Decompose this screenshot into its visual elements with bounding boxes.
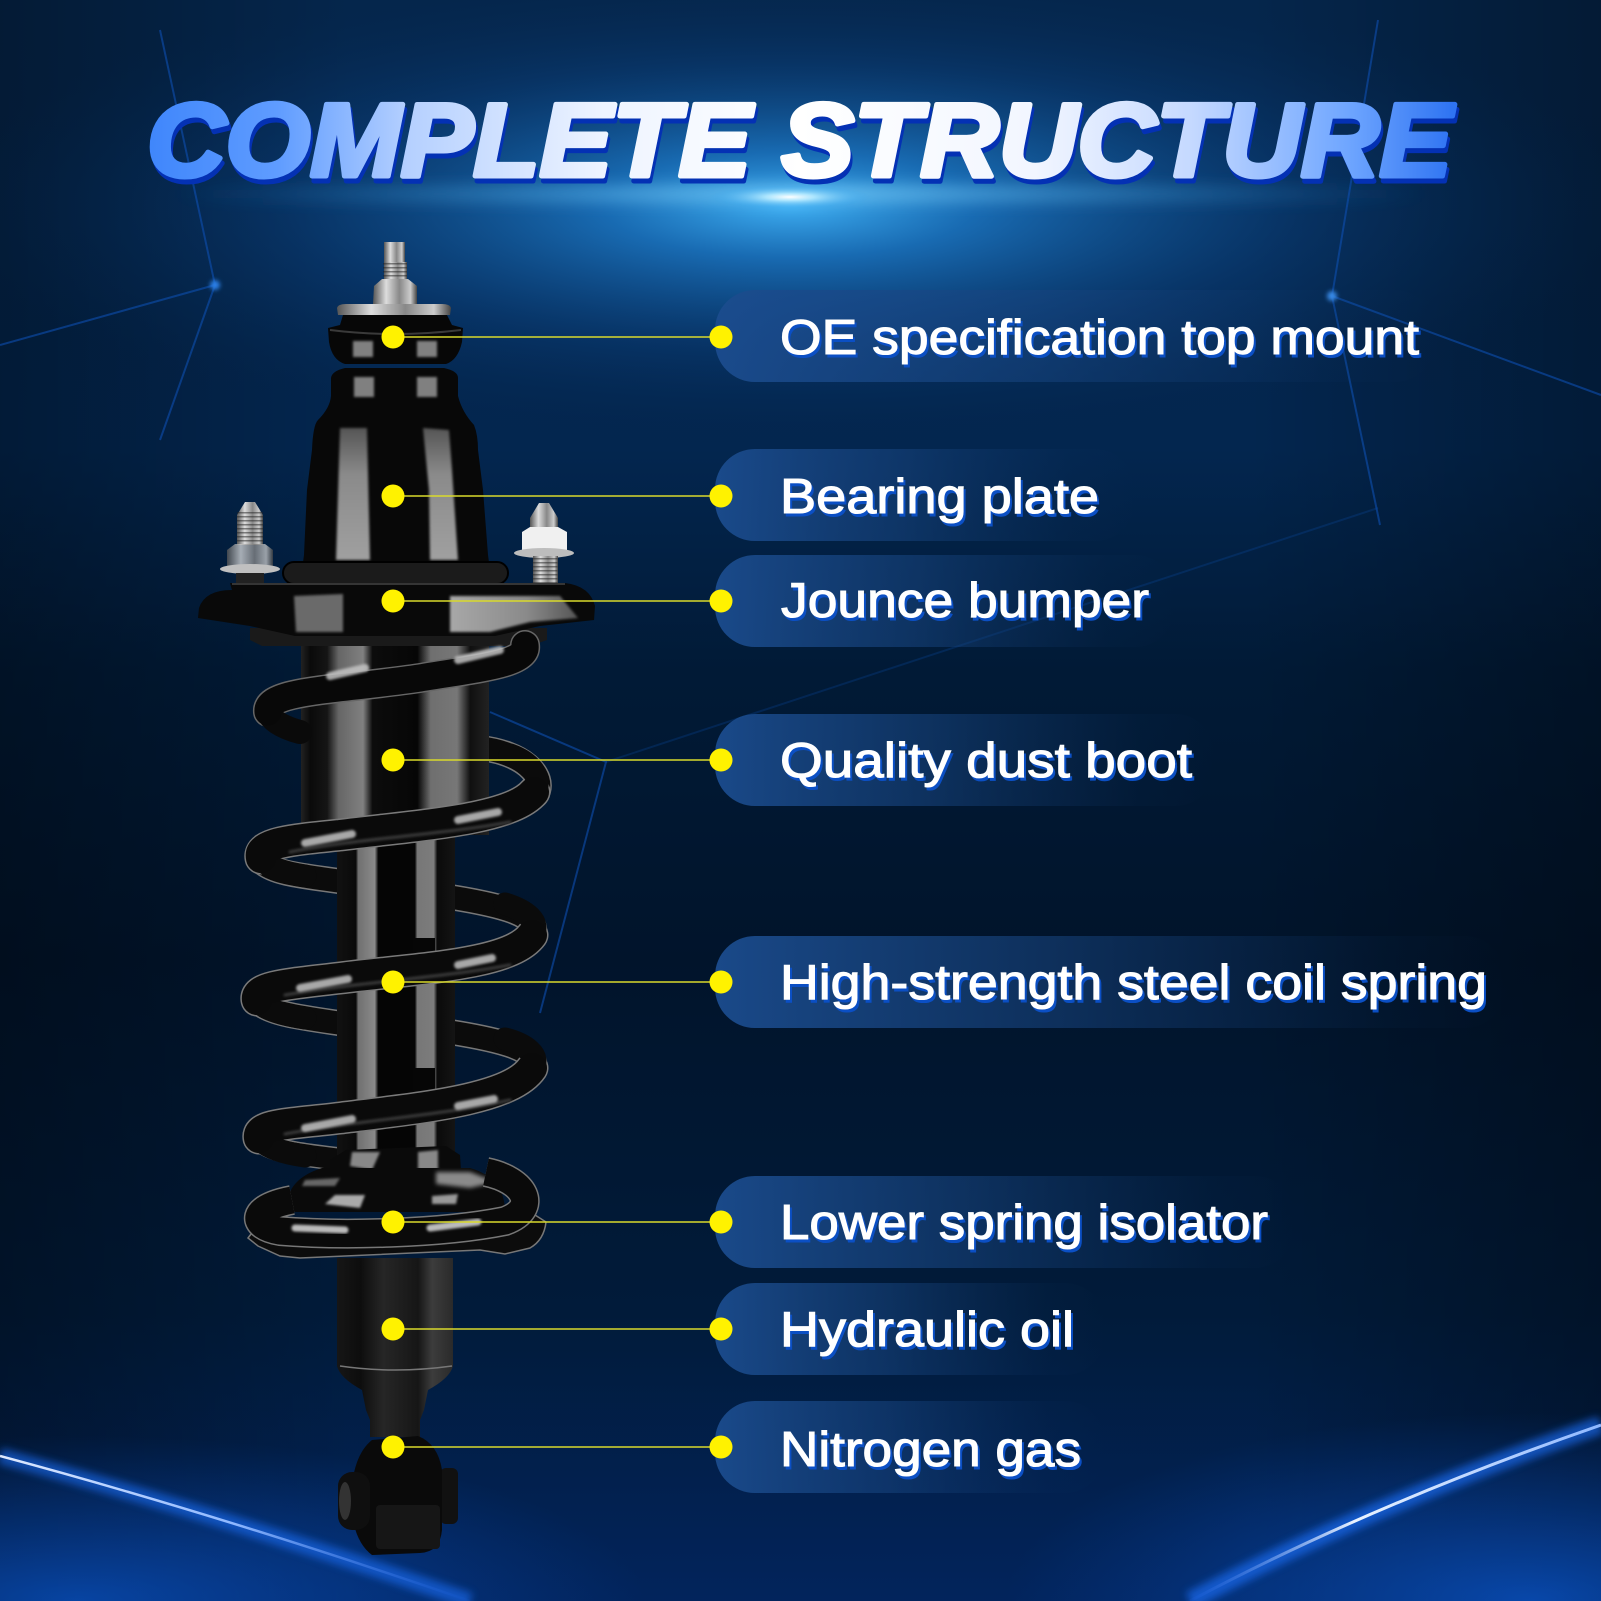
spring coil 3 bbox=[257, 904, 535, 1018]
label: High-strength steel coil spring: High-strength steel coil spring bbox=[780, 956, 1487, 1010]
hydraulic tube bbox=[337, 1258, 453, 1437]
label: Lower spring isolator: Lower spring isolator bbox=[780, 1196, 1268, 1250]
mount plate bbox=[198, 583, 595, 636]
spring coil 2 bbox=[261, 755, 537, 876]
lower spring isolator bbox=[248, 1146, 546, 1258]
top mount rubber bbox=[328, 315, 463, 364]
lower bushing eye bbox=[338, 1436, 458, 1555]
dust boot cylinder bbox=[301, 640, 489, 835]
pill: OE specification top mount bbox=[715, 290, 1435, 382]
pill: Jounce bumper bbox=[715, 555, 1175, 647]
pill: High-strength steel coil spring bbox=[715, 936, 1505, 1028]
top stud and nut bbox=[337, 242, 451, 315]
label: Bearing plate: Bearing plate bbox=[780, 470, 1099, 524]
pill: Hydraulic oil bbox=[715, 1283, 1105, 1375]
shock absorber strut bbox=[198, 242, 595, 1555]
label: Nitrogen gas: Nitrogen gas bbox=[780, 1423, 1081, 1477]
label: Quality dust boot: Quality dust boot bbox=[780, 734, 1192, 788]
lower plate rim bbox=[250, 628, 547, 646]
spring top coil bbox=[257, 645, 537, 1156]
label: OE specification top mount: OE specification top mount bbox=[780, 311, 1419, 365]
pill: Quality dust boot bbox=[715, 714, 1215, 806]
left mounting stud bbox=[220, 502, 280, 584]
main damper rod bbox=[337, 810, 455, 1160]
spring back segments bbox=[258, 748, 539, 1160]
spring seat bbox=[248, 1215, 546, 1258]
bottom light arcs bbox=[0, 1425, 1601, 1601]
callout dots bbox=[382, 326, 732, 1458]
bottom coil bbox=[259, 1172, 525, 1234]
rubber ring bbox=[283, 562, 508, 584]
callout lines bbox=[393, 337, 721, 1447]
rod collar bbox=[330, 1146, 462, 1185]
label: Hydraulic oil: Hydraulic oil bbox=[780, 1303, 1074, 1357]
spring coil 4 bbox=[259, 1039, 535, 1156]
title: COMPLETE STRUCTURE bbox=[147, 83, 1455, 199]
spring specular highlights bbox=[300, 650, 500, 1128]
bearing plate boot bbox=[302, 368, 490, 570]
pill: Nitrogen gas bbox=[715, 1401, 1105, 1493]
pill: Bearing plate bbox=[715, 449, 1135, 541]
isolator dome bbox=[287, 1168, 505, 1212]
right mounting stud bbox=[514, 503, 574, 585]
label: Jounce bumper: Jounce bumper bbox=[781, 574, 1149, 628]
background polygon lines bbox=[0, 20, 1601, 1013]
pill: Lower spring isolator bbox=[715, 1176, 1295, 1268]
